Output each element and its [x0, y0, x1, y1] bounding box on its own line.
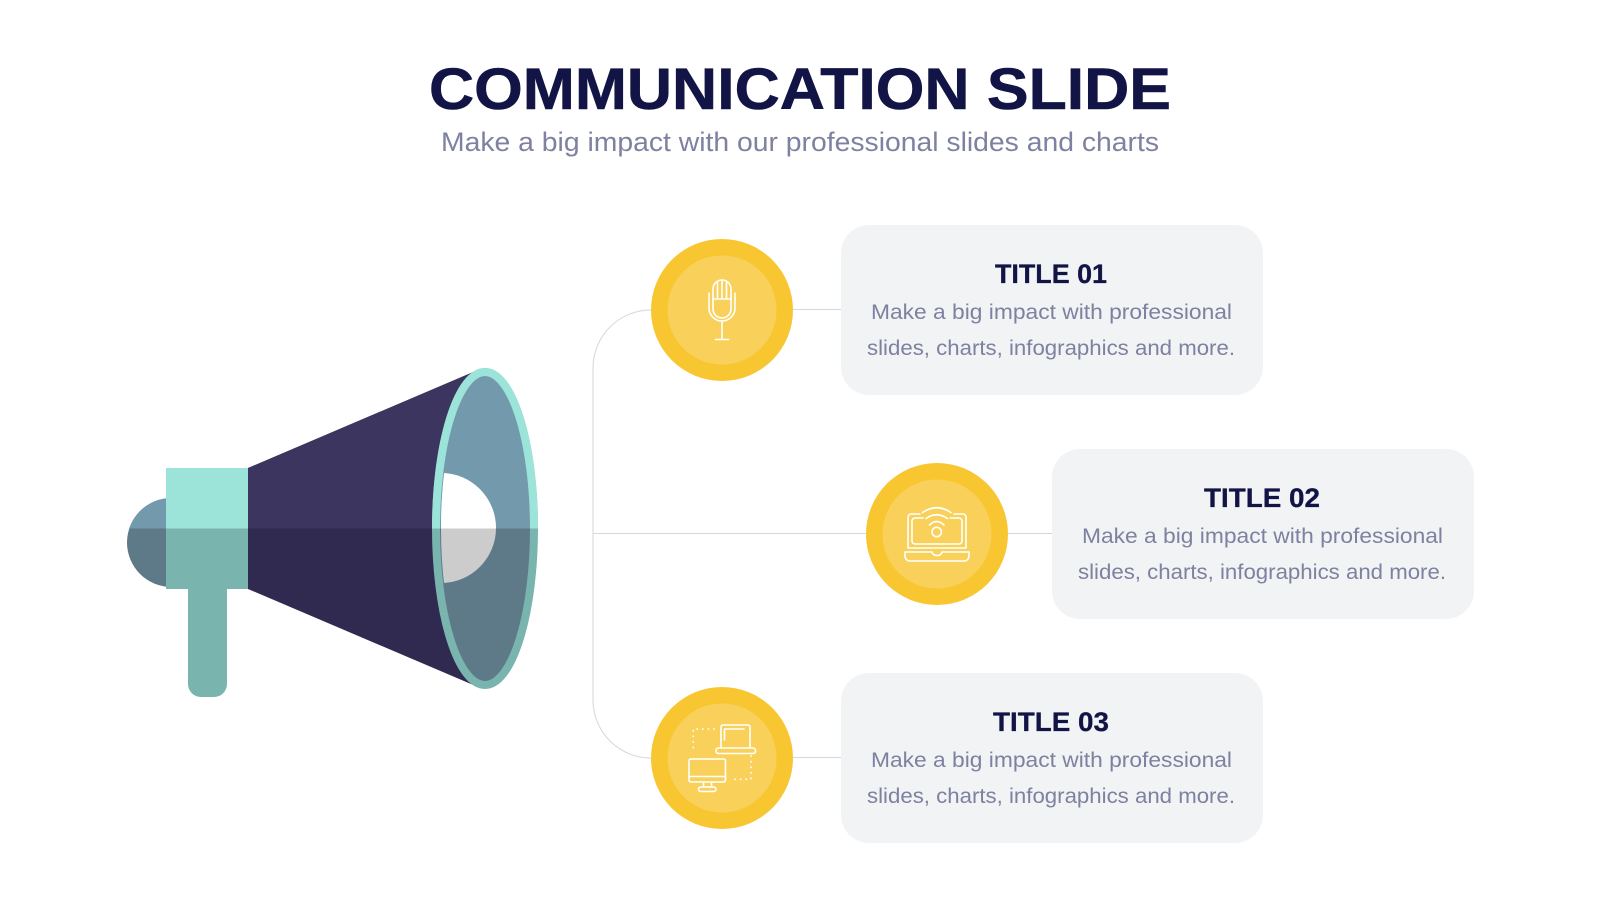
card 01 — [841, 225, 1263, 395]
card 02 — [1052, 449, 1474, 619]
card 03 text — [867, 749, 1235, 808]
card 02 text — [1078, 525, 1446, 584]
item 02 badge — [866, 463, 1008, 605]
card 03 — [841, 673, 1263, 843]
megaphone handle — [188, 589, 227, 697]
megaphone mouth — [432, 368, 538, 689]
card 03 heading: TITLE 03 — [993, 707, 1109, 737]
card 02 text: slides, charts, infographics and more. — [1078, 561, 1446, 584]
card 03 text: Make a big impact with professional — [871, 749, 1232, 772]
megaphone cone — [248, 370, 478, 687]
connector lines — [593, 310, 1052, 758]
item 03 badge — [651, 687, 793, 829]
card 01 heading: TITLE 01 — [995, 259, 1107, 289]
megaphone body box — [166, 468, 248, 589]
card 01 text: Make a big impact with professional — [871, 301, 1232, 324]
title: COMMUNICATION SLIDE — [429, 57, 1171, 122]
infographic canvas — [127, 68, 1474, 843]
icon: connected laptop and desktop — [689, 725, 756, 792]
icon: microphone — [709, 280, 735, 340]
subtitle: Make a big impact with our professional slides and charts — [441, 127, 1159, 157]
card 02 text: Make a big impact with professional — [1082, 525, 1443, 548]
card 01 text: slides, charts, infographics and more. — [867, 337, 1235, 360]
item 01 badge — [651, 239, 793, 381]
card 03 text: slides, charts, infographics and more. — [867, 785, 1235, 808]
card 01 text — [867, 301, 1235, 360]
card 02 heading: TITLE 02 — [1204, 483, 1320, 513]
icon: laptop with wifi — [905, 508, 969, 561]
megaphone rear dome — [127, 498, 166, 587]
icon: megaphone — [127, 370, 534, 697]
